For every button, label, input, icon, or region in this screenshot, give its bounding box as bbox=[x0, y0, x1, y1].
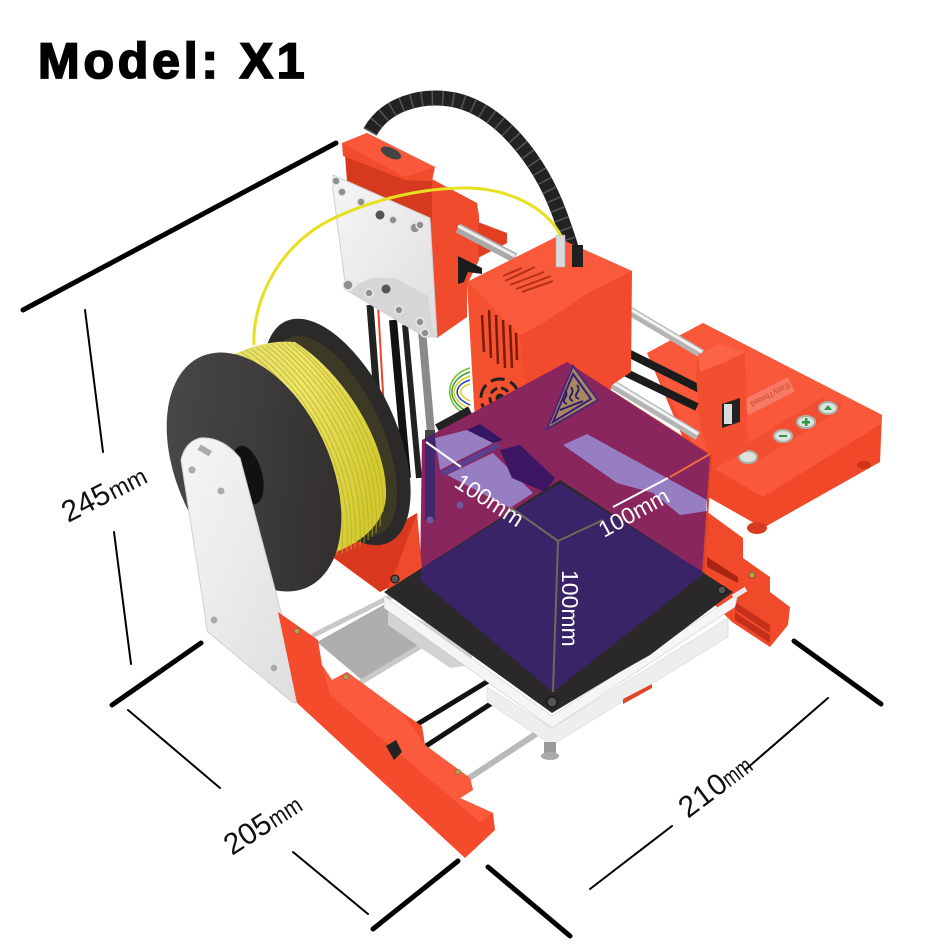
buttons bbox=[739, 402, 837, 463]
fan guard bbox=[481, 379, 519, 417]
rear rod end bbox=[733, 589, 746, 597]
volume edge lines bbox=[426, 442, 710, 692]
title: Model: X1 bbox=[38, 33, 308, 89]
spool rear flange bbox=[233, 297, 441, 567]
print volume overlay bbox=[420, 362, 710, 692]
brand label: EasyThreed bbox=[749, 381, 791, 408]
cable chain bbox=[370, 98, 574, 264]
heated bed stack bbox=[384, 480, 746, 760]
print volume backing bbox=[420, 362, 712, 692]
label: depth 205mm bbox=[218, 787, 308, 862]
label: depth 205mm: 205 bbox=[218, 807, 278, 862]
board stripe and components bbox=[440, 443, 500, 476]
label: width 210mm: 210 bbox=[672, 766, 735, 825]
rear y-frame bbox=[700, 511, 790, 647]
y-axis rods under bed bbox=[312, 596, 536, 780]
inner label right: 100mm bbox=[594, 482, 674, 542]
x-axis rods and belts bbox=[610, 308, 702, 436]
label: depth 205mm: mm bbox=[263, 792, 307, 833]
side vents bbox=[482, 310, 517, 368]
z-axis red housing bbox=[425, 178, 479, 338]
label: width 210mm bbox=[672, 748, 758, 825]
small black clip bbox=[458, 256, 482, 284]
bed surface bbox=[384, 480, 733, 713]
nozzle tube bbox=[556, 235, 565, 267]
warning sign bbox=[547, 366, 598, 429]
corner screws bbox=[391, 575, 726, 707]
label: width 210mm: mm bbox=[717, 752, 758, 792]
label: height 245mm: 245 bbox=[56, 477, 116, 529]
print volume dark lower faces bbox=[420, 483, 703, 692]
front y-frame bbox=[278, 612, 495, 858]
top vents bbox=[503, 267, 553, 292]
rear-left frame bbox=[327, 513, 422, 592]
x-axis end bracket bbox=[696, 344, 748, 470]
electronics board white areas bbox=[435, 430, 493, 470]
label: height 245mm: mm bbox=[104, 463, 152, 505]
rear base unit bbox=[647, 323, 882, 534]
spool support bracket bbox=[181, 438, 297, 703]
inner dimension labels: 100mm bbox=[450, 468, 529, 532]
filament drum bbox=[219, 342, 386, 590]
acrylic plate bbox=[332, 175, 437, 337]
wires bbox=[450, 368, 470, 417]
x-axis upper rod bbox=[458, 226, 515, 258]
dimension lines bbox=[23, 143, 881, 936]
spool front flange bbox=[131, 325, 377, 619]
inner label vertical: 100mm bbox=[557, 570, 583, 647]
spool hub bbox=[227, 442, 269, 508]
wire chain bbox=[437, 410, 470, 428]
extruder carriage box bbox=[467, 235, 632, 450]
brand label bbox=[741, 377, 795, 415]
vertical rods and belts bbox=[370, 305, 432, 478]
printer bbox=[131, 98, 882, 858]
top block bbox=[342, 133, 435, 222]
label: height 245mm bbox=[56, 459, 152, 529]
yellow filament bbox=[254, 188, 561, 345]
